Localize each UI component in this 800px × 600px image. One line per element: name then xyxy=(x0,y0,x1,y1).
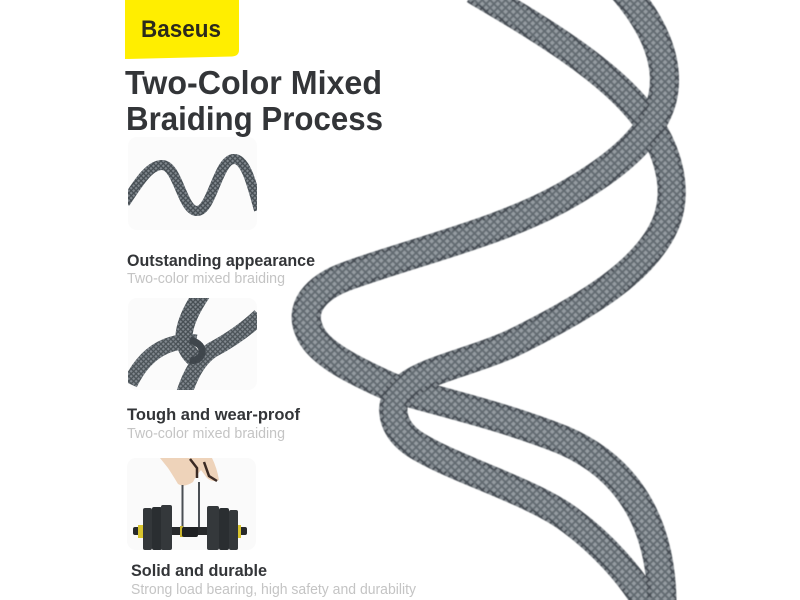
caption: two-color mixed braiding: Two-color mixed braiding xyxy=(127,270,285,287)
heading: solid and durable: Solid and durable xyxy=(131,561,267,580)
icon: knotted cables xyxy=(128,298,257,390)
panel: outstanding appearance xyxy=(128,154,257,216)
heading: outstanding appearance: Outstanding appearance xyxy=(127,251,315,270)
title: Two-Color Mixed xyxy=(125,64,382,101)
heading: tough and wear-proof: Tough and wear-proof xyxy=(127,405,300,424)
cable strand B xyxy=(306,0,664,600)
cable crossing overlay xyxy=(378,347,472,460)
cable strand A xyxy=(393,0,672,600)
title xyxy=(125,64,383,137)
icon: hand lifting dumbbell xyxy=(133,458,247,550)
main braided cable xyxy=(306,0,672,600)
panel: tough and wear-proof xyxy=(128,298,257,390)
caption: two-color mixed braiding: Two-color mixed braiding xyxy=(127,425,285,442)
brand tag: Baseus: Baseus xyxy=(141,16,221,43)
caption: strong load bearing: Strong load bearing, high safety and durability xyxy=(131,581,416,598)
panel: solid and durable xyxy=(127,458,256,550)
icon: wavy cable xyxy=(125,159,259,211)
brand tag: Baseus xyxy=(125,0,239,59)
title: Braiding Process xyxy=(126,100,383,137)
